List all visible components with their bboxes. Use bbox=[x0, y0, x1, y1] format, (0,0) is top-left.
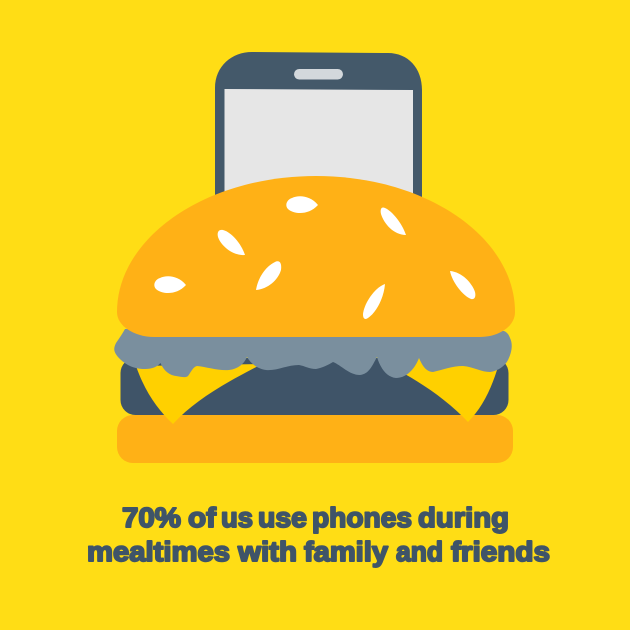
headline text: during bbox=[418, 502, 509, 533]
icon: burger bbox=[114, 176, 515, 463]
headline text: use bbox=[258, 502, 307, 533]
bottom bun bbox=[117, 415, 513, 463]
burger patty bbox=[120, 358, 508, 415]
headline text bbox=[87, 502, 550, 567]
headline text: phones bbox=[312, 502, 412, 533]
headline text: with bbox=[237, 536, 297, 567]
headline text: us bbox=[221, 502, 253, 533]
top bun bbox=[117, 176, 515, 337]
headline text: and bbox=[396, 536, 443, 567]
headline text: 70% bbox=[122, 502, 181, 533]
headline text: friends bbox=[451, 536, 550, 567]
phone screen bbox=[224, 89, 413, 210]
headline text: mealtimes bbox=[87, 536, 230, 567]
icon: smartphone bbox=[215, 52, 422, 210]
lettuce bbox=[114, 320, 512, 378]
headline text: of bbox=[188, 502, 217, 533]
phone speaker bbox=[294, 69, 343, 80]
sesame seeds bbox=[154, 196, 475, 319]
headline text: family bbox=[304, 536, 388, 567]
cheese slice bbox=[136, 350, 497, 424]
